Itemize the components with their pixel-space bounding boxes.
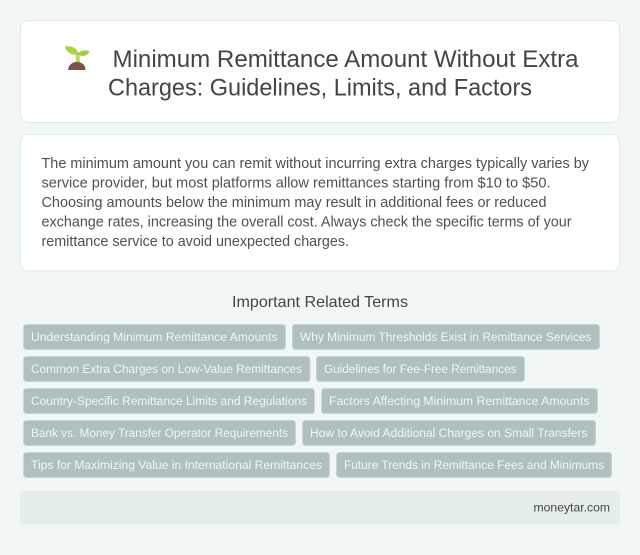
chip [292,324,600,350]
chip: Tips for Maximizing Value in International Remittances [31,458,322,472]
panel: term chips [24,324,612,478]
chip: Why Minimum Thresholds Exist in Remittance Services [300,330,592,344]
chip: Understanding Minimum Remittance Amounts [31,330,278,344]
panel: title header [20,20,620,122]
title [108,46,579,102]
footer bar [20,491,620,524]
chip [24,324,286,350]
chip [336,452,612,478]
summary paragraph [42,155,589,250]
chip: Factors Affecting Minimum Remittance Amounts [329,394,590,408]
summary paragraph: The minimum amount you can remit without incurring extra charges typically varies by [42,155,589,172]
summary paragraph: service provider, but most platforms allow remittances starting from $10 to $50. [42,174,550,192]
heading: important related terms: Important Related Terms [232,294,408,311]
chip: How to Avoid Additional Charges on Small Transfers [310,426,588,440]
chip: Common Extra Charges on Low-Value Remittances [31,362,302,376]
chip [24,420,296,446]
chip [24,356,310,382]
chip [24,388,314,414]
footer site name: moneytar.com [534,500,610,514]
chip: Future Trends in Remittance Fees and Minimums [344,458,604,472]
summary paragraph: Choosing amounts below the minimum may result in additional fees or reduced [42,194,546,211]
title: Minimum Remittance Amount Without Extra [112,46,579,73]
chip [316,356,524,382]
summary paragraph: exchange rates, increasing the overall cost. Always check the specific terms of your [42,214,572,230]
chip: Bank vs. Money Transfer Operator Requirements [31,426,288,440]
chip: Country-Specific Remittance Limits and Regulations [31,394,307,408]
chip [322,388,598,414]
chip [302,420,596,446]
icon: sprout [65,46,90,70]
summary paragraph: remittance service to avoid unexpected charges. [42,233,349,250]
title: Charges: Guidelines, Limits, and Factors [108,74,532,102]
chip [24,452,330,478]
panel: summary text [20,134,620,271]
chip: Guidelines for Fee-Free Remittances [324,362,516,376]
